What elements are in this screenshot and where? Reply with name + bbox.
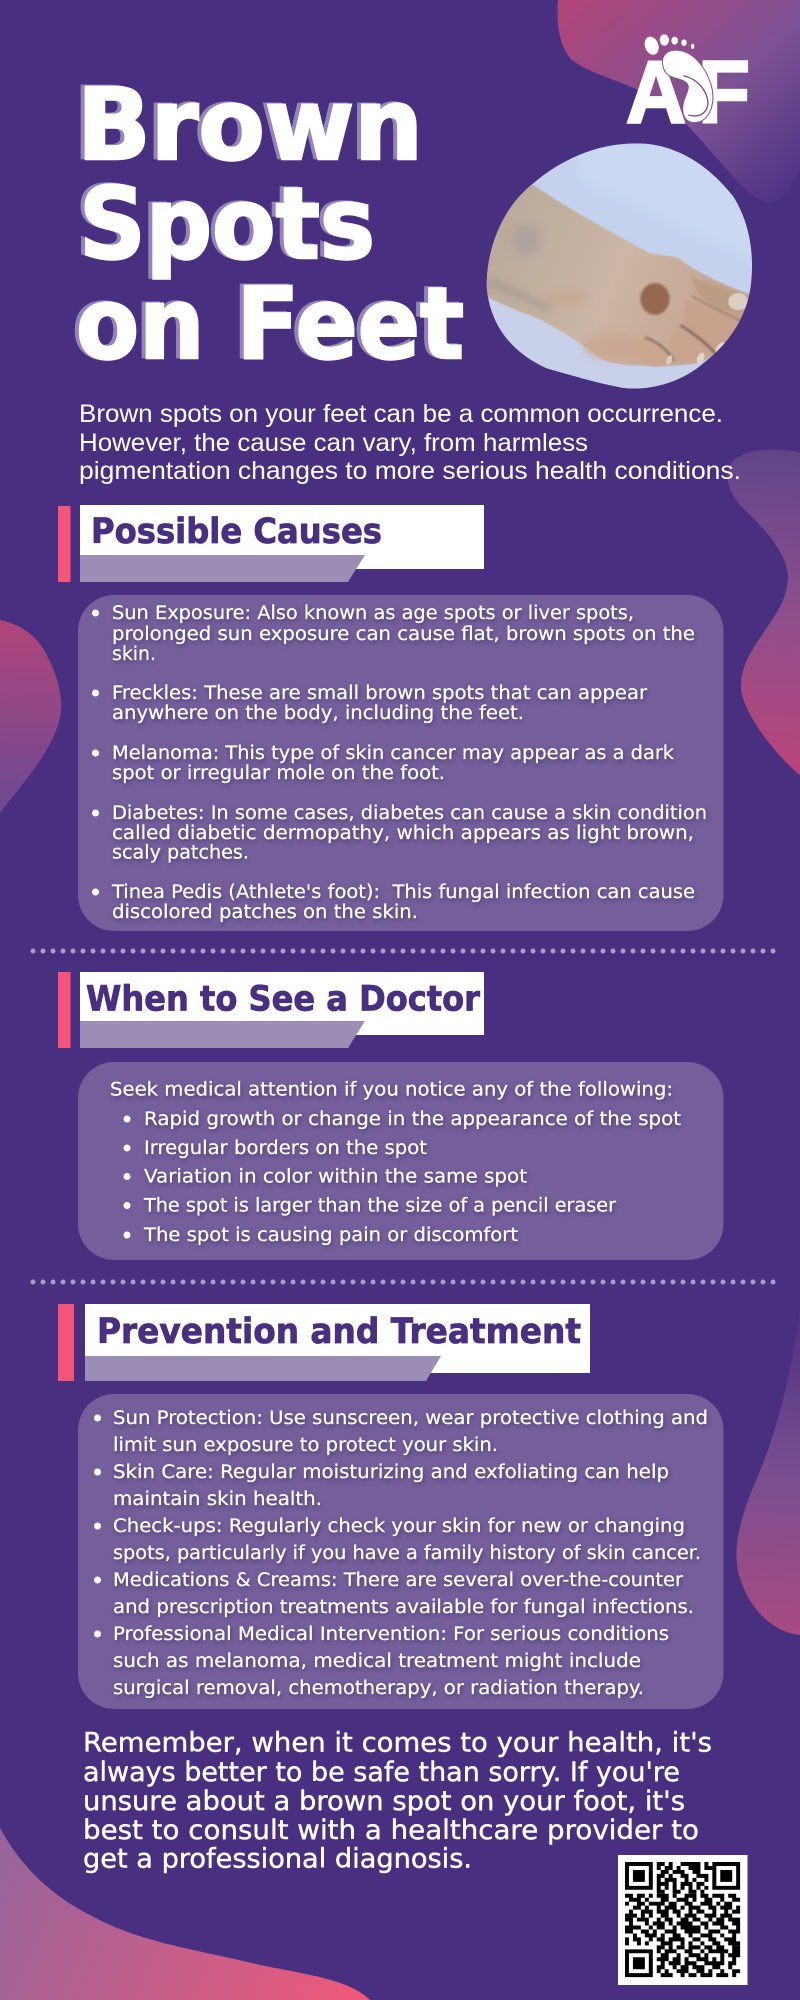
- panel: possible causes: skin.: [112, 644, 156, 665]
- title: [76, 68, 464, 382]
- heading: prevention and treatment: Prevention and Treatment: [97, 1312, 581, 1352]
- panel: prevention and treatment: Check-ups: Regularly check your skin for new or changing: [113, 1516, 685, 1537]
- panel: when to see a doctor: The spot is causing pain or discomfort: [143, 1225, 518, 1246]
- blob: top right: [558, 0, 800, 203]
- panel: prevention and treatment: spots, particularly if you have a family history of skin cancer.: [113, 1543, 701, 1564]
- closing message: always better to be safe than sorry. If you're: [83, 1757, 680, 1788]
- closing message: [83, 1728, 712, 1874]
- panel: possible causes: scaly patches.: [112, 842, 249, 864]
- title: Spots: [79, 167, 375, 282]
- panel: prevention and treatment: [78, 1394, 724, 1709]
- panel: possible causes: prolonged sun exposure can cause flat, brown spots on the: [112, 624, 695, 645]
- panel: prevention and treatment: Sun Protection: Use sunscreen, wear protective clothing and: [113, 1408, 708, 1429]
- logo: AF foot: A: [626, 42, 686, 142]
- closing message: get a professional diagnosis.: [83, 1844, 472, 1874]
- intro paragraph: pigmentation changes to more serious health conditions.: [79, 457, 741, 485]
- logo: AF foot: [626, 34, 750, 142]
- blob: bottom left: [0, 1828, 370, 2000]
- panel: possible causes: anywhere on the body, including the feet.: [112, 703, 524, 724]
- intro paragraph: [79, 400, 741, 485]
- closing message: Remember, when it comes to your health, it's: [83, 1728, 712, 1758]
- panel: when to see a doctor: [78, 1062, 724, 1260]
- panel: possible causes: Freckles: These are small brown spots that can appear: [112, 683, 647, 704]
- panel: when to see a doctor: Irregular borders on the spot: [144, 1138, 427, 1159]
- closing message: unsure about a brown spot on your foot, it's: [83, 1786, 685, 1817]
- toes: [692, 277, 750, 313]
- heading: when to see a doctor: When to See a Doctor: [86, 980, 481, 1020]
- panel: possible causes: called diabetic dermopathy, which appears as light brown,: [112, 823, 694, 844]
- blob: left: [0, 620, 61, 813]
- heading: prevention and treatment: [58, 1304, 590, 1381]
- panel: possible causes: Sun Exposure: Also known as age spots or liver spots,: [112, 603, 634, 624]
- panel: when to see a doctor: Seek medical attention if you notice any of the following:: [110, 1080, 673, 1100]
- QR code: [618, 1855, 748, 1985]
- panel: possible causes: Melanoma: This type of skin cancer may appear as a dark: [112, 743, 674, 764]
- heading: possible causes: [58, 505, 484, 582]
- panel: when to see a doctor: The spot is larger than the size of a pencil eraser: [143, 1196, 616, 1216]
- panel: possible causes: spot or irregular mole on the foot.: [112, 763, 445, 784]
- blob: right lower: [736, 1307, 800, 1635]
- blob: right upper: [728, 450, 800, 775]
- intro paragraph: Brown spots on your feet can be a common occurrence.: [79, 400, 723, 428]
- panel: prevention and treatment: such as melanoma, medical treatment might include: [113, 1651, 641, 1672]
- panel: prevention and treatment: limit sun exposure to protect your skin.: [113, 1435, 498, 1456]
- intro paragraph: However, the cause can vary, from harmless: [79, 429, 588, 457]
- panel: when to see a doctor: Rapid growth or change in the appearance of the spot: [144, 1109, 681, 1130]
- panel: possible causes: [78, 595, 724, 931]
- panel: prevention and treatment: and prescription treatments available for fungal infections.: [113, 1597, 694, 1618]
- closing message: best to consult with a healthcare provider to: [83, 1815, 699, 1846]
- panel: possible causes: Tinea Pedis (Athlete's foot): This fungal infection can cause: [111, 882, 695, 903]
- panel: when to see a doctor: Variation in color within the same spot: [144, 1166, 527, 1188]
- heading: possible causes: Possible Causes: [91, 512, 382, 552]
- title: Brown: [77, 68, 423, 183]
- heading: when to see a doctor: [58, 972, 484, 1048]
- panel: prevention and treatment: Medications & Creams: There are several over-the-counter: [113, 1570, 683, 1591]
- panel: prevention and treatment: Professional Medical Intervention: For serious conditions: [113, 1624, 669, 1645]
- panel: prevention and treatment: maintain skin health.: [113, 1489, 322, 1510]
- panel: possible causes: discolored patches on the skin.: [112, 902, 418, 923]
- panel: possible causes: Diabetes: In some cases, diabetes can cause a skin condition: [112, 803, 707, 824]
- panel: prevention and treatment: Skin Care: Regular moisturizing and exfoliating can help: [113, 1462, 669, 1483]
- photo: foot with brown spot: [486, 143, 752, 388]
- title: on Feet: [76, 267, 464, 382]
- panel: prevention and treatment: surgical removal, chemotherapy, or radiation therapy.: [113, 1678, 644, 1699]
- logo: AF foot: F: [698, 42, 750, 142]
